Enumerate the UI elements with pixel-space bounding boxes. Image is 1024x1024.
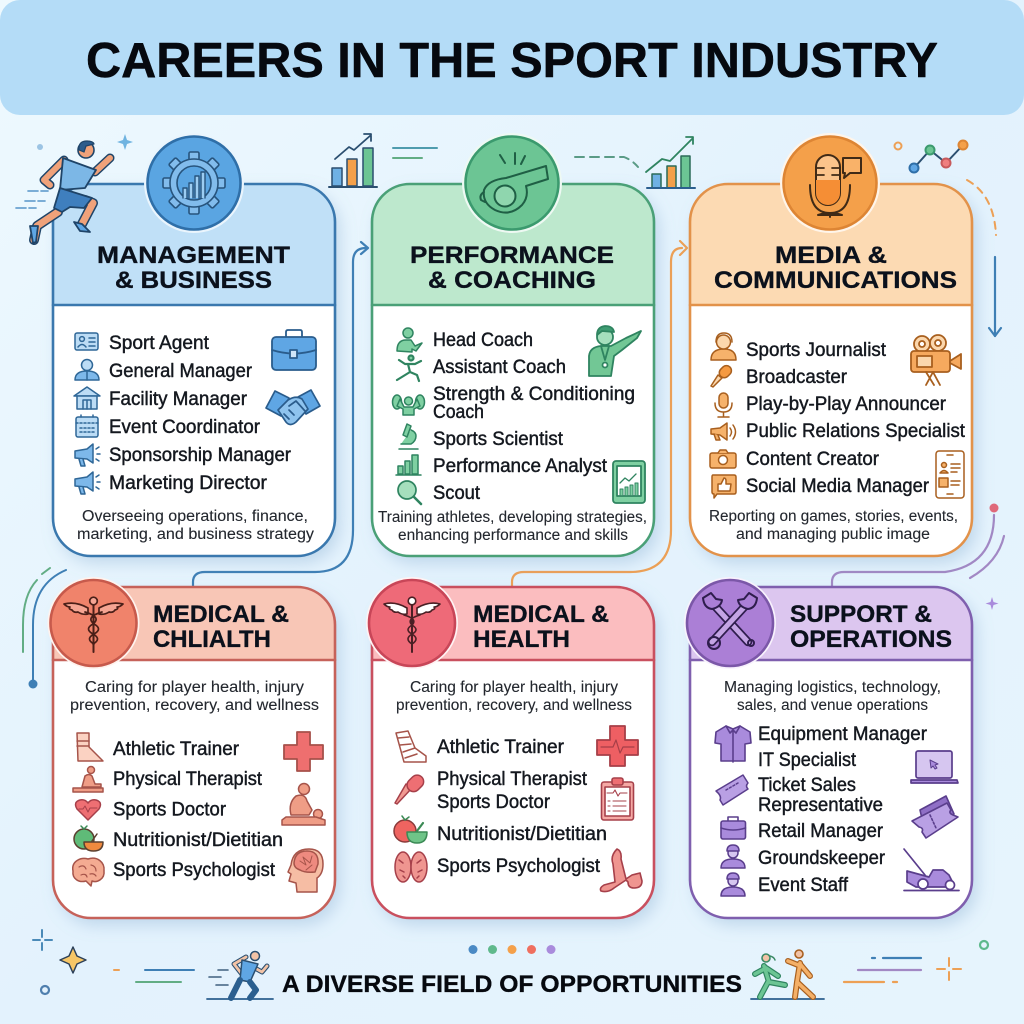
job list: Play-by-Play Announcer xyxy=(746,393,946,415)
icon: thumbs up xyxy=(712,475,736,498)
icon: groundskeeper xyxy=(721,845,745,868)
icon: facility xyxy=(74,387,100,409)
icon: brain xyxy=(395,852,427,882)
job list: Strength & Conditioning xyxy=(433,383,635,405)
icon: therapist xyxy=(73,766,103,792)
job list: Physical Therapist xyxy=(113,768,263,790)
icon: cross with pulse xyxy=(597,726,638,766)
title: CAREERS IN THE SPORT INDUSTRY xyxy=(86,34,938,88)
icon: red cross xyxy=(284,732,323,771)
heading: MEDICAL & xyxy=(473,601,609,628)
title banner xyxy=(0,0,1024,115)
icon: tablet xyxy=(613,461,645,503)
icon: broadcaster microphone xyxy=(711,364,733,387)
heading: PERFORMANCE xyxy=(410,242,614,269)
chart: top right growth xyxy=(646,137,695,188)
description: Reporting on games, stories, events, xyxy=(709,508,958,525)
icon: movie camera xyxy=(911,335,961,385)
panel: medical and health xyxy=(372,587,654,918)
icon: anatomy shape xyxy=(600,849,642,892)
icon: head coach xyxy=(397,328,422,352)
connector: management to performance xyxy=(193,242,368,587)
job list: Social Media Manager xyxy=(746,475,929,497)
job list xyxy=(437,736,607,877)
network dots xyxy=(894,140,968,172)
panel: media and communications xyxy=(690,184,972,556)
dashed arc xyxy=(967,180,996,235)
job list: Sports Doctor xyxy=(113,798,226,820)
small dot and sparkle xyxy=(37,134,133,150)
description xyxy=(724,679,941,714)
description xyxy=(70,679,319,714)
job list: Ticket Sales xyxy=(758,774,856,796)
job list: Groundskeeper xyxy=(758,847,885,869)
job list xyxy=(758,723,927,896)
icon disc: caduceus xyxy=(48,577,140,669)
heading: & BUSINESS xyxy=(115,267,272,294)
job list: Physical Therapist xyxy=(437,768,588,790)
lines xyxy=(393,148,437,158)
icon: journalist xyxy=(711,333,736,360)
icon: clipboard xyxy=(602,778,634,820)
icon: camera xyxy=(710,450,736,468)
icon: bars xyxy=(396,455,421,475)
job list: Broadcaster xyxy=(746,366,847,388)
job list: Athletic Trainer xyxy=(113,738,239,760)
heading: HEALTH xyxy=(473,626,570,653)
icon: briefcase xyxy=(272,330,316,370)
job list: Sports Scientist xyxy=(433,428,564,450)
job list: Equipment Manager xyxy=(758,723,927,745)
description: prevention, recovery, and wellness xyxy=(396,697,632,714)
job list: Sports Psychologist xyxy=(437,855,601,877)
footer decoration left xyxy=(33,930,194,994)
icon: apple and bowl xyxy=(394,816,427,843)
panel: performance and coaching xyxy=(372,184,654,556)
icon: head with brain xyxy=(288,849,323,892)
job list: Public Relations Specialist xyxy=(746,420,966,442)
icon: microscope xyxy=(399,424,418,449)
job list xyxy=(109,332,291,494)
job list: IT Specialist xyxy=(758,749,857,771)
icon: studio microphone xyxy=(715,393,732,417)
icon: handshake xyxy=(266,390,320,424)
description xyxy=(378,509,647,544)
job list: Sponsorship Manager xyxy=(109,444,291,466)
icon: id card xyxy=(75,333,98,350)
job list xyxy=(433,329,635,504)
description: Overseeing operations, finance, xyxy=(82,508,308,525)
icon: massage xyxy=(282,784,325,825)
icon disc: whistle xyxy=(462,133,562,233)
job list: Head Coach xyxy=(433,329,533,351)
description: enhancing performance and skills xyxy=(398,527,628,544)
job list: Scout xyxy=(433,482,481,504)
heading xyxy=(473,601,609,653)
job list: General Manager xyxy=(109,360,252,382)
icon: brain xyxy=(73,858,104,886)
description: sales, and venue operations xyxy=(737,697,928,714)
icon: coach pointing xyxy=(589,326,641,376)
icon: magnifier xyxy=(398,481,421,504)
left decorative arcs xyxy=(23,568,66,688)
description xyxy=(396,679,632,714)
panel: medical and chlialth xyxy=(53,587,335,918)
icon: microphone xyxy=(395,772,426,804)
job list: Facility Manager xyxy=(109,388,247,410)
icon: apple and bowl xyxy=(74,826,103,851)
job list: Coach xyxy=(433,401,484,423)
icon: ticket xyxy=(716,775,748,805)
job list: Athletic Trainer xyxy=(437,736,564,758)
heading xyxy=(153,601,289,653)
job list: Retail Manager xyxy=(758,820,883,842)
icon: manager xyxy=(75,360,99,380)
sparkle: purple xyxy=(986,597,998,610)
job list: Nutritionist/Dietitian xyxy=(437,823,607,845)
connector: performance to media xyxy=(512,241,687,587)
heading xyxy=(97,242,290,294)
icon: public relations megaphone xyxy=(711,423,736,440)
runner illustration xyxy=(16,141,110,243)
heading xyxy=(790,601,952,653)
job list xyxy=(113,738,283,881)
icon: weightlifter xyxy=(392,395,424,415)
arrow: down xyxy=(989,257,1001,336)
icon: laptop xyxy=(911,751,958,783)
footer dots xyxy=(468,945,556,954)
job list: Sports Doctor xyxy=(437,791,550,813)
heading: COMMUNICATIONS xyxy=(714,267,957,294)
job list: Performance Analyst xyxy=(433,455,608,477)
heading: MANAGEMENT xyxy=(97,242,290,269)
panel: support and operations xyxy=(690,587,972,918)
job list: Event Coordinator xyxy=(109,416,260,438)
icon: megaphone xyxy=(75,472,100,494)
icon: event staff xyxy=(721,873,745,896)
icon: heart xyxy=(76,800,100,820)
heading: CHLIALTH xyxy=(153,626,271,653)
description: Training athletes, developing strategies, xyxy=(378,509,647,526)
description: marketing, and business strategy xyxy=(77,526,314,543)
heading: OPERATIONS xyxy=(790,626,952,653)
icon: tickets xyxy=(912,796,958,838)
job list: Nutritionist/Dietitian xyxy=(113,829,283,851)
description: prevention, recovery, and wellness xyxy=(70,697,319,714)
dashed trend line xyxy=(575,157,638,167)
job list: Sports Psychologist xyxy=(113,859,276,881)
heading xyxy=(714,242,957,294)
job list: Sports Journalist xyxy=(746,339,887,361)
panel: management and business xyxy=(53,184,335,556)
heading: & COACHING xyxy=(428,267,596,294)
icon disc: microphone xyxy=(780,133,880,233)
description xyxy=(77,508,314,543)
icon: foot xyxy=(77,733,103,761)
job list: Sport Agent xyxy=(109,332,210,354)
icon: bag xyxy=(721,817,746,839)
job list: Representative xyxy=(758,794,883,816)
heading xyxy=(410,242,614,294)
heading: MEDIA & xyxy=(775,242,887,269)
description: Caring for player health, injury xyxy=(85,679,304,696)
icon: calendar xyxy=(76,415,98,437)
job list: Assistant Coach xyxy=(433,356,566,378)
description: Caring for player health, injury xyxy=(410,679,618,696)
icon disc: white caduceus xyxy=(366,577,458,669)
icon: lawn mower xyxy=(904,849,959,890)
icon: megaphone xyxy=(75,444,100,466)
job list: Content Creator xyxy=(746,448,879,470)
footer decoration right xyxy=(844,941,988,982)
icon: phone xyxy=(936,451,964,498)
footer runners pair xyxy=(751,950,824,999)
icon: runner xyxy=(397,356,421,381)
icon disc: crossed wrenches xyxy=(684,577,776,669)
footer runner xyxy=(207,952,273,999)
connector: media to support xyxy=(832,504,1004,587)
icon disc: gear and chart xyxy=(144,133,244,233)
footer text: A DIVERSE FIELD OF OPPORTUNITIES xyxy=(282,971,742,998)
job list: Event Staff xyxy=(758,874,849,896)
job list: Marketing Director xyxy=(109,472,267,494)
description xyxy=(709,508,958,543)
heading: MEDICAL & xyxy=(153,601,289,628)
icon: shirt xyxy=(715,726,751,762)
description: Managing logistics, technology, xyxy=(724,679,941,696)
description: and managing public image xyxy=(736,526,930,543)
icon: bandaged foot xyxy=(396,731,426,762)
heading: SUPPORT & xyxy=(790,601,932,628)
chart: top left growth xyxy=(329,134,377,187)
job list xyxy=(746,339,966,497)
